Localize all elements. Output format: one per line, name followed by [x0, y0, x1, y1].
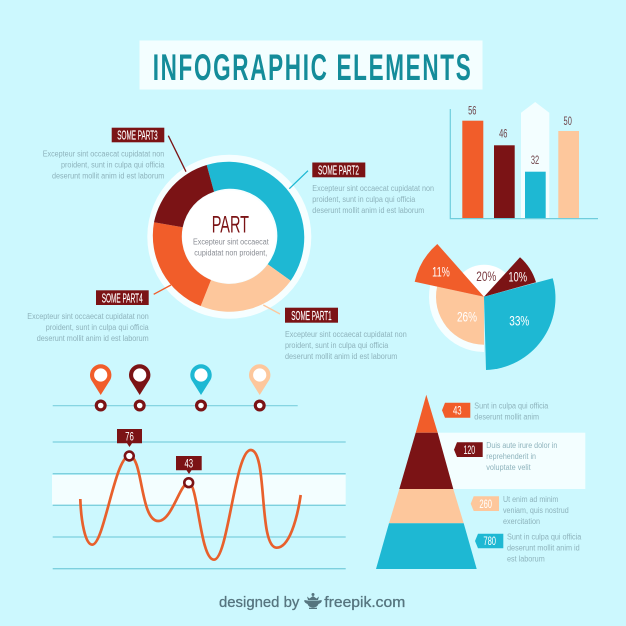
pyramid item 120: 120	[463, 445, 475, 457]
title: INFOGRAPHIC ELEMENTS	[153, 46, 471, 88]
segment: some part 4	[153, 222, 211, 306]
pyramid item 120: Duis aute irure dolor in	[486, 441, 557, 450]
axes	[450, 109, 598, 219]
footer credit: designed by	[219, 595, 300, 611]
callout: some part 2	[289, 162, 434, 215]
panel: highlighted row	[437, 433, 585, 489]
footer credit: freepik.com	[324, 595, 405, 611]
segment: some part 2	[207, 162, 304, 281]
line chart	[52, 429, 346, 569]
callout: some part 3: proident, sunt in culpa qui officia	[61, 160, 165, 170]
pyramid item 260	[471, 495, 569, 526]
pyramid item 780: Sunt in culpa qui officia	[507, 532, 582, 542]
pyramid item 260: Ut enim ad minim	[503, 495, 559, 504]
slice 11%	[415, 244, 484, 297]
callout: some part 2: proident, sunt in culpa qui officia	[312, 195, 416, 204]
slice 10%: 10%	[508, 269, 527, 285]
slice 20%: 20%	[476, 268, 496, 284]
pyramid item 120: voluptate velit	[486, 463, 531, 472]
donut centre text: cupidatat non proident,	[194, 248, 267, 258]
callout: some part 1: Excepteur sint occaecat cupidatat non	[285, 330, 407, 339]
bar 46: 46	[499, 126, 508, 140]
pyramid item 120	[454, 441, 557, 472]
bar 50	[558, 114, 579, 218]
pyramid item 260: veniam, quis nostrud	[503, 506, 569, 515]
slice 33%: 33%	[509, 313, 529, 329]
donut centre text: Excepteur sint occaecat	[193, 238, 269, 246]
callout: some part 4: SOME PART4	[102, 290, 143, 306]
slice 20%	[463, 265, 506, 297]
marker 76	[117, 429, 142, 460]
callout: some part 1	[263, 305, 407, 361]
curve	[80, 450, 301, 560]
bar 46	[494, 126, 515, 218]
bar chart	[450, 102, 598, 219]
pyramid item 43	[442, 402, 549, 422]
highlight arrow	[521, 102, 549, 218]
callout: some part 4: proident, sunt in culpa qui officia	[46, 323, 149, 332]
donut centre text	[183, 190, 276, 283]
callout: some part 1: SOME PART1	[291, 308, 332, 323]
bar 32: 32	[531, 153, 539, 167]
bar 56	[462, 103, 483, 218]
callout: some part 4	[27, 285, 171, 343]
donut chart	[147, 155, 311, 319]
slice 33%	[484, 278, 555, 370]
callout: some part 4: deserunt mollit anim id est laborum	[37, 334, 149, 343]
slice 11%: 11%	[432, 264, 450, 280]
pyramid item 260: exercitation	[503, 517, 540, 526]
callout: some part 3: Excepteur sint occaecat cupidatat non	[43, 150, 164, 158]
callout: some part 3: deserunt mollit anim id est laborum	[52, 172, 165, 180]
pyramid item 780: 780	[483, 536, 496, 548]
footer credit	[219, 593, 405, 611]
pin timeline	[53, 364, 298, 410]
pin: peach	[249, 364, 270, 410]
slice 10%	[484, 257, 536, 297]
slice 26%: 26%	[457, 308, 477, 324]
segment: some part 1	[201, 264, 291, 312]
bar 56: 56	[468, 103, 477, 117]
callout: some part 1: proident, sunt in culpa qui officia	[285, 341, 389, 350]
slice 26%	[436, 286, 484, 345]
pie halo	[429, 285, 484, 352]
pyramid item 780: deserunt mollit anim id	[507, 544, 580, 552]
pie chart	[415, 244, 555, 370]
pin: orange	[90, 364, 111, 410]
donut centre text: PART	[212, 211, 249, 238]
pyramid item 120: reprehenderit in	[486, 452, 536, 461]
bar 50: 50	[564, 114, 572, 128]
callout: some part 3	[43, 128, 186, 180]
pyramid item 43: deserunt mollit anim	[474, 412, 539, 422]
callout: some part 2: SOME PART2	[318, 163, 359, 178]
pyramid chart	[376, 395, 477, 569]
callout: some part 2: deserunt mollit anim id est laborum	[312, 206, 425, 215]
pin: dark red	[129, 364, 150, 410]
callout: some part 2: Excepteur sint occaecat cupidatat non	[312, 184, 434, 193]
pyramid item 780: est laborum	[507, 554, 545, 564]
marker 76: 76	[125, 431, 134, 443]
callout: some part 3: SOME PART3	[117, 128, 158, 143]
segment: some part 3	[154, 165, 214, 227]
pyramid item 260: 260	[479, 499, 492, 511]
marker 43	[176, 456, 202, 487]
pyramid item 780	[475, 532, 582, 564]
callout: some part 1: deserunt mollit anim id est laborum	[285, 352, 398, 361]
bar 32	[525, 153, 546, 218]
icon: freepik logo	[304, 593, 322, 609]
pin: teal	[190, 364, 212, 410]
pyramid item 43: 43	[453, 405, 462, 417]
marker 43: 43	[184, 458, 193, 470]
callout: some part 4: Excepteur sint occaecat cupidatat non	[27, 312, 149, 321]
pyramid item 43: Sunt in culpa qui officia	[474, 402, 549, 410]
